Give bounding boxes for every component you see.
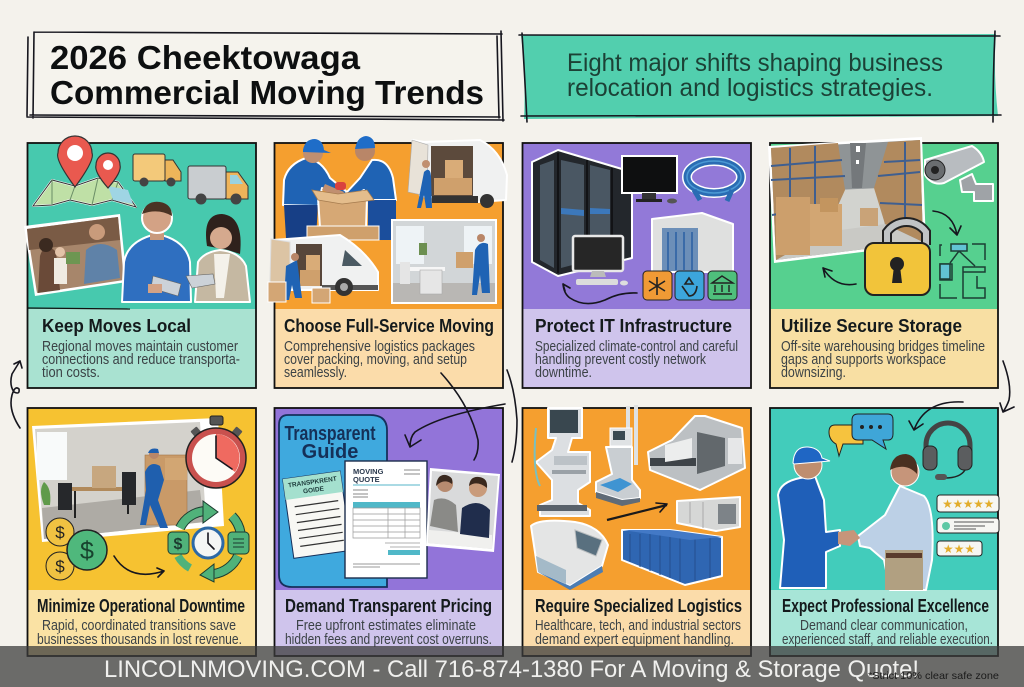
arrow bbox=[909, 402, 963, 430]
arrow bbox=[405, 404, 505, 447]
icon: imaging station bbox=[596, 405, 640, 506]
body text: handling prevent costly network bbox=[535, 352, 707, 368]
arrow bbox=[114, 556, 164, 577]
document: moving quote: MOVING bbox=[353, 467, 384, 476]
photo: shopkeeper handshake bbox=[24, 214, 127, 296]
icon: headset bbox=[923, 423, 972, 480]
heading: Require Specialized Logistics bbox=[535, 596, 742, 616]
icon: three star review: ★★★ bbox=[943, 542, 975, 556]
panel: utilize secure storage bbox=[768, 137, 998, 388]
icon: white medical machine bbox=[531, 521, 608, 590]
icon: time and money cycle: $ bbox=[174, 536, 183, 553]
body text: downtime. bbox=[535, 365, 592, 381]
panel: expect professional excellence bbox=[770, 402, 999, 656]
body text: downsizing. bbox=[781, 365, 846, 381]
heading: Demand Transparent Pricing bbox=[285, 596, 492, 616]
heading: Protect IT Infrastructure bbox=[535, 316, 732, 336]
body text: Off-site warehousing bridges timeline bbox=[781, 339, 985, 355]
card: transparent guide bbox=[279, 415, 387, 587]
heading: Minimize Operational Downtime bbox=[37, 596, 245, 616]
photo: mover in office bbox=[32, 418, 224, 542]
icon: white shipping container bbox=[677, 497, 740, 531]
icon: parked van bbox=[268, 235, 378, 303]
footer text: LINCOLNMOVING.COM - Call 716-874-1380 For A Moving & Storage Quote! bbox=[104, 656, 919, 683]
icon: coins: $ bbox=[55, 557, 65, 576]
icon: five star review: ★★★★★ bbox=[942, 497, 994, 511]
icon: floor plan diagram bbox=[940, 244, 985, 298]
panel: minimize operational downtime bbox=[27, 408, 256, 656]
heading: Keep Moves Local bbox=[42, 316, 191, 336]
arrow: right side bbox=[1000, 361, 1014, 412]
card: transparent guide: Transparent bbox=[284, 423, 376, 445]
arrowhead bbox=[656, 503, 667, 512]
body text: gaps and supports workspace bbox=[781, 352, 946, 368]
title text: 2026 Cheektowaga bbox=[50, 39, 361, 76]
document: transparent guide checklist: TRANSPKRENT bbox=[288, 476, 337, 489]
person: woman in beige blazer bbox=[186, 214, 250, 302]
icon: monitor bbox=[622, 156, 677, 204]
body text: hidden fees and prevent cost overruns. bbox=[285, 632, 492, 648]
panel: protect IT infrastructure bbox=[522, 143, 751, 388]
icon: map with location pins bbox=[33, 136, 136, 207]
icon: medical cart bbox=[535, 408, 590, 516]
icon: time and money cycle bbox=[168, 501, 249, 582]
subtitle text: Eight major shifts shaping business bbox=[567, 49, 943, 77]
title box bbox=[27, 31, 504, 121]
body text: Demand clear communication, bbox=[800, 618, 968, 634]
icon: security camera bbox=[925, 146, 993, 201]
icon: server racks bbox=[532, 150, 632, 276]
document: moving quote bbox=[345, 461, 427, 578]
icon: blue shipping container bbox=[622, 530, 722, 585]
panel: demand transparent pricing bbox=[274, 404, 505, 656]
document: transparent guide checklist: GOIDE bbox=[303, 485, 325, 495]
safe zone note: *Strict 10% clear safe zone bbox=[868, 670, 999, 682]
icon: small delivery truck bbox=[133, 154, 181, 186]
panel: choose full-service moving bbox=[268, 136, 507, 388]
icon: large delivery truck bbox=[188, 166, 248, 204]
icon: coins: $ bbox=[80, 537, 94, 565]
photo: office with mover bbox=[391, 219, 497, 304]
icon: coins: $ bbox=[55, 523, 65, 542]
panel: keep moves local bbox=[24, 136, 256, 388]
icon: coins bbox=[46, 518, 107, 580]
person: mover right bbox=[346, 136, 396, 240]
icon: desktop computer bbox=[573, 236, 628, 286]
icon: speech bubbles bbox=[829, 414, 893, 456]
icon: industrial machine bbox=[648, 416, 745, 490]
photo: warehouse aisle bbox=[768, 137, 926, 263]
subtitle banner bbox=[519, 31, 1001, 122]
body text: Rapid, coordinated transitions save bbox=[42, 618, 236, 634]
body text: Healthcare, tech, and industrial sectors bbox=[535, 618, 741, 634]
arrow bbox=[933, 211, 961, 235]
heading: Utilize Secure Storage bbox=[781, 316, 962, 336]
subtitle text: relocation and logistics strategies. bbox=[567, 74, 933, 102]
arrow bbox=[563, 284, 637, 304]
arrow: centre right curve bbox=[507, 370, 517, 462]
person: mover left bbox=[283, 139, 347, 238]
icon: climate-controlled room bbox=[652, 213, 733, 272]
arrow bbox=[823, 268, 856, 285]
icon: network cable bbox=[687, 161, 741, 201]
title text: Commercial Moving Trends bbox=[50, 74, 484, 111]
card: transparent guide: Guide bbox=[302, 441, 358, 463]
footer call-to-action bar bbox=[0, 646, 1024, 687]
icon: five star review bbox=[937, 495, 999, 512]
body text: businesses thousands in lost revenue. bbox=[37, 632, 242, 648]
body text: connections and reduce transporta- bbox=[42, 352, 240, 368]
body text: cover packing, moving, and setup bbox=[284, 352, 467, 368]
icon: loading van bbox=[408, 140, 507, 208]
document: transparent guide checklist bbox=[283, 471, 351, 558]
person: mover in blue coveralls bbox=[778, 447, 840, 588]
arrow bbox=[607, 505, 667, 520]
person: man in blue polo bbox=[122, 202, 191, 302]
icon: three star review bbox=[937, 541, 982, 556]
body text: seamlessly. bbox=[284, 365, 347, 381]
arrow: centre connector bbox=[441, 373, 478, 460]
icon: comment review bbox=[937, 518, 999, 533]
heading: Choose Full-Service Moving bbox=[284, 316, 494, 336]
icon: climate, care and security badges bbox=[643, 271, 737, 300]
document: moving quote: QUOTE bbox=[353, 475, 380, 484]
arrow: loop left bbox=[11, 361, 22, 428]
icon: stopwatch bbox=[186, 416, 246, 488]
body text: demand expert equipment handling. bbox=[535, 632, 734, 648]
panel: require specialized logistics bbox=[522, 405, 751, 656]
body text: Specialized climate-control and careful bbox=[535, 339, 738, 355]
body text: Free upfront estimates eliminate bbox=[296, 618, 476, 634]
body text: tion costs. bbox=[42, 365, 100, 381]
person: man in blue shirt bbox=[858, 454, 933, 590]
icon: padlock bbox=[865, 222, 930, 295]
body text: Comprehensive logistics packages bbox=[284, 339, 475, 355]
icon: cardboard boxes bbox=[307, 190, 379, 240]
photo: clients reviewing quote bbox=[426, 468, 500, 552]
icon: handshake bbox=[838, 530, 860, 546]
body text: Regional moves maintain customer bbox=[42, 339, 238, 355]
